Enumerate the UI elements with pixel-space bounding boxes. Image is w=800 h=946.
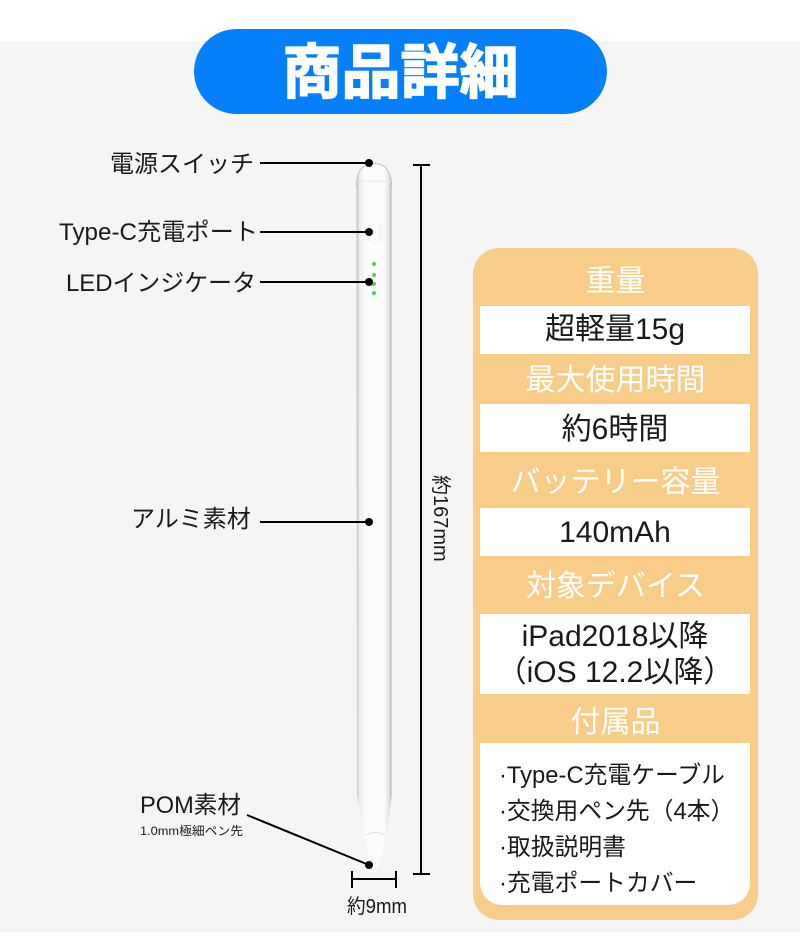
accessory: manual: ·取扱説明書: [499, 834, 626, 861]
value: usage time: 約6時間: [562, 413, 668, 446]
heading: target devices: 対象デバイス: [526, 570, 705, 603]
value: devices: iPad2018以降: [522, 620, 708, 653]
value: weight: 超軽量15g: [545, 313, 685, 346]
heading: battery capacity: バッテリー容量: [510, 466, 720, 499]
heading: accessories: 付属品: [570, 706, 660, 739]
title pill: [194, 29, 607, 114]
accessory: cable: ·Type-C充電ケーブル: [499, 762, 725, 789]
label: power switch: [110, 151, 373, 178]
title pill: 商品詳細: [282, 40, 518, 106]
label: POM material: POM素材: [140, 792, 241, 819]
label: aluminium material: アルミ素材: [131, 506, 251, 533]
label: Type-C port: [59, 219, 373, 246]
label: power switch: 電源スイッチ: [110, 151, 254, 178]
panel background: [473, 248, 758, 920]
accessory: tips: ·交換用ペン先（4本）: [499, 798, 734, 825]
dimension: width 9mm: [347, 871, 407, 918]
value: devices: [480, 614, 750, 694]
label: LED indicator: LEDインジケータ: [66, 270, 256, 297]
label: Type-C port: Type-C充電ポート: [59, 219, 258, 246]
heading: max usage time: 最大使用時間: [526, 364, 706, 397]
value: battery: 140mAh: [559, 516, 671, 549]
value: accessories list: [480, 743, 750, 905]
icon: LED indicators: [372, 262, 376, 295]
value: usage time: [480, 404, 750, 452]
label: POM material: [140, 792, 373, 869]
value: devices: （iOS 12.2以降）: [497, 656, 733, 689]
bottom white band: [0, 932, 800, 946]
value: battery: [480, 508, 750, 556]
dimension: width 9mm: 約9mm: [347, 895, 407, 918]
icon: stylus pen: [356, 164, 392, 871]
label: POM material: 1.0mm極細ペン先: [140, 823, 243, 838]
accessory: port cover: ·充電ポートカバー: [499, 870, 697, 897]
dimension: length 167mm: [413, 165, 452, 874]
dimension: length 167mm: 約167mm: [429, 475, 452, 562]
label: aluminium material: [131, 506, 373, 533]
label: LED indicator: [66, 270, 373, 297]
value: weight: [480, 306, 750, 354]
top white band: [0, 0, 800, 41]
heading: weight: 重量: [586, 265, 646, 298]
